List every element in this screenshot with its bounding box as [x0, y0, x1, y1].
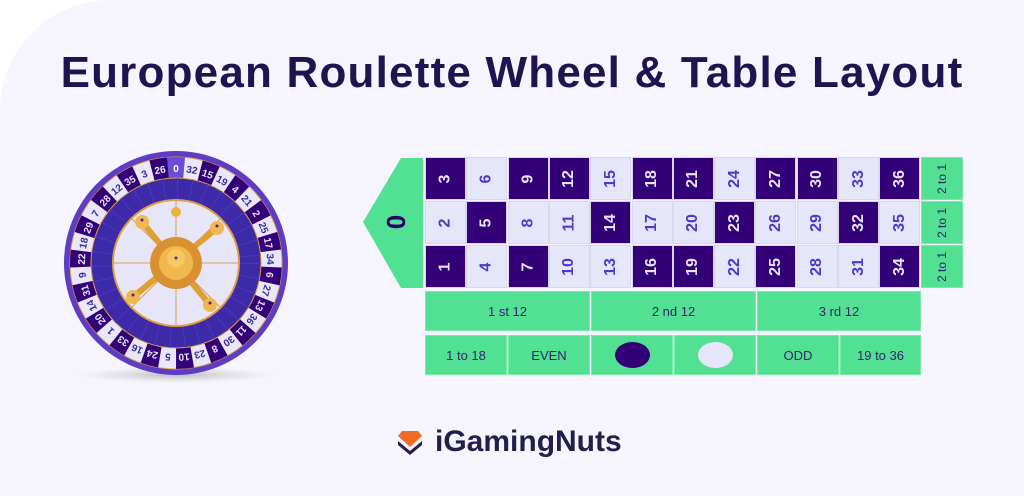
number grid	[425, 157, 920, 288]
outside bets	[425, 335, 921, 375]
number grid: 19	[684, 258, 701, 275]
brand name: iGamingNuts	[435, 425, 622, 458]
number grid: 5	[478, 218, 495, 227]
roulette wheel: 23	[192, 347, 206, 360]
roulette wheel: 30	[220, 333, 236, 348]
roulette wheel: 26	[154, 164, 167, 177]
number grid: 12	[560, 170, 577, 187]
roulette wheel: 12	[110, 182, 125, 198]
zero pocket	[363, 158, 423, 288]
roulette wheel: 29	[82, 221, 97, 235]
roulette wheel: 15	[200, 168, 215, 182]
roulette wheel: 5	[164, 350, 171, 362]
roulette wheel: 17	[261, 237, 274, 250]
number grid: 1	[436, 262, 454, 271]
logo	[398, 425, 622, 458]
roulette wheel: 8	[209, 342, 219, 355]
roulette wheel: 21	[238, 193, 254, 209]
number grid: 35	[891, 214, 908, 231]
roulette wheel: 31	[80, 283, 93, 297]
dozen bets	[425, 291, 921, 331]
dozen bets: 3 rd 12	[819, 304, 859, 318]
number grid: 3	[436, 174, 454, 183]
roulette wheel: 1	[105, 324, 117, 336]
column bets: 2 to 1	[935, 207, 949, 238]
roulette wheel: 36	[243, 311, 259, 327]
number grid: 22	[726, 258, 743, 275]
roulette wheel: 24	[145, 347, 159, 360]
number grid: 30	[808, 170, 825, 187]
roulette wheel: 7	[90, 208, 103, 219]
dozen bets: 2 nd 12	[652, 304, 695, 318]
icon: diamond	[398, 431, 422, 455]
roulette wheel: 10	[178, 350, 190, 362]
number grid: 14	[602, 214, 619, 231]
roulette wheel: 16	[130, 341, 145, 356]
roulette wheel: 32	[185, 164, 199, 177]
number grid: 36	[891, 170, 908, 187]
roulette wheel: 3	[140, 169, 150, 181]
column bets	[921, 157, 963, 288]
number grid: 4	[478, 262, 495, 271]
column bets: 2 to 1	[935, 163, 949, 194]
number grid: 13	[602, 258, 619, 275]
number grid: 23	[726, 214, 743, 231]
number grid: 15	[602, 170, 619, 187]
roulette wheel: 0	[173, 164, 179, 175]
zero pocket: 0	[381, 215, 411, 229]
roulette wheel: 20	[93, 311, 109, 326]
number grid: 10	[560, 258, 577, 275]
outside bets: ODD	[784, 348, 812, 362]
roulette wheel: 33	[116, 333, 131, 348]
number grid: 8	[519, 218, 536, 227]
title: European Roulette Wheel & Table Layout	[61, 48, 963, 97]
number grid: 6	[478, 174, 495, 183]
number grid: 24	[726, 170, 743, 187]
roulette wheel: 28	[98, 193, 114, 209]
roulette wheel: 25	[256, 221, 270, 236]
number grid: 28	[808, 258, 825, 275]
number grid: 26	[767, 214, 784, 231]
roulette wheel: 13	[252, 298, 267, 313]
number grid: 25	[767, 258, 784, 275]
column bets: 2 to 1	[935, 251, 949, 282]
roulette wheel: 14	[85, 297, 100, 313]
roulette wheel: 2	[249, 209, 262, 220]
number grid: 20	[684, 214, 701, 231]
number grid: 2	[436, 218, 454, 227]
roulette wheel: 27	[258, 283, 272, 298]
roulette wheel: 9	[77, 271, 89, 278]
roulette wheel: 11	[233, 323, 248, 338]
number grid: 7	[519, 262, 536, 271]
roulette wheel: 4	[229, 184, 241, 197]
dozen bets: 1 st 12	[488, 304, 527, 318]
roulette wheel: 35	[123, 174, 138, 189]
number grid: 9	[519, 174, 536, 183]
number grid: 18	[643, 170, 660, 187]
number grid: 17	[643, 214, 660, 231]
outside bets: 19 to 36	[857, 348, 904, 362]
number grid: 27	[767, 170, 784, 187]
roulette wheel: 34	[264, 253, 275, 265]
number grid: 16	[643, 258, 660, 275]
number grid: 33	[849, 170, 866, 187]
roulette wheel: 18	[78, 236, 91, 250]
roulette wheel	[64, 151, 288, 382]
number grid: 31	[849, 258, 866, 275]
roulette wheel: 22	[77, 253, 88, 265]
roulette wheel: 6	[263, 271, 275, 279]
outside bets: 1 to 18	[446, 348, 486, 362]
number grid: 21	[684, 170, 701, 187]
number grid: 11	[560, 214, 577, 231]
number grid: 34	[891, 258, 908, 275]
number grid: 32	[849, 214, 866, 231]
number grid: 29	[808, 214, 825, 231]
roulette wheel: 19	[214, 174, 230, 189]
outside bets: EVEN	[531, 348, 567, 362]
